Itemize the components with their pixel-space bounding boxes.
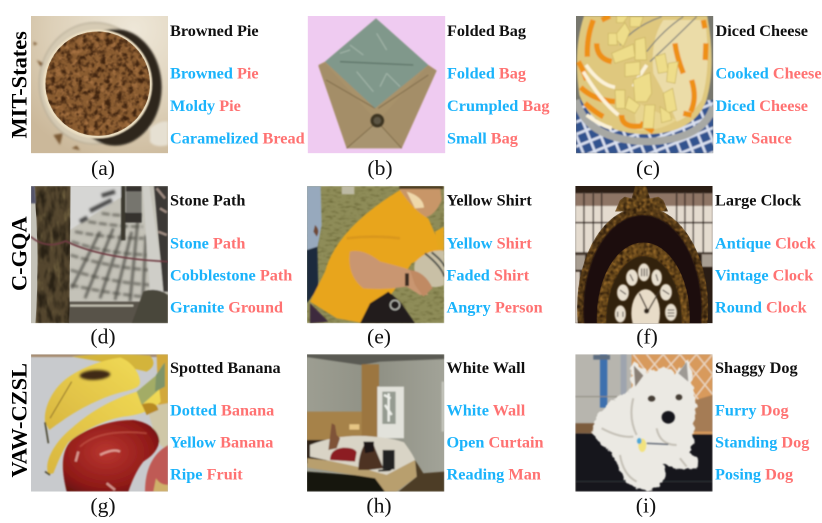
label: Diced Cheese: Diced Cheese	[716, 97, 808, 115]
title: Shaggy Dog: Shaggy Dog	[715, 359, 798, 377]
label: Open Curtain: Open Curtain	[446, 434, 544, 452]
panel (c): diced cheese	[576, 16, 822, 180]
label: Standing Dog: Standing Dog	[715, 434, 809, 452]
photo: browned pie	[31, 16, 168, 154]
caption (g): (g)	[90, 494, 116, 518]
caption (h): (h)	[366, 494, 392, 518]
label: Dotted Banana: Dotted Banana	[170, 401, 274, 419]
panel (a): browned pie	[31, 16, 305, 180]
caption (c): (c)	[636, 156, 660, 180]
photo: yellow shirt	[307, 186, 444, 324]
caption (a): (a)	[91, 156, 115, 180]
label: Antique Clock: Antique Clock	[715, 234, 817, 252]
photo: diced cheese	[576, 16, 714, 154]
label: Yellow Banana: Yellow Banana	[170, 434, 273, 452]
label: Yellow Shirt: Yellow Shirt	[446, 234, 532, 252]
panel (b): folded bag	[308, 16, 550, 180]
title: Browned Pie: Browned Pie	[170, 22, 259, 40]
label: Ripe Fruit: Ripe Fruit	[170, 466, 243, 484]
label: Vintage Clock: Vintage Clock	[715, 266, 814, 284]
photo: folded bag	[308, 16, 446, 154]
label: Moldy Pie: Moldy Pie	[170, 97, 241, 115]
panel (d): stone path	[31, 186, 292, 348]
label: Angry Person: Angry Person	[446, 299, 543, 317]
caption (e): (e)	[367, 324, 391, 348]
photo: large clock	[575, 186, 713, 324]
panel (i): shaggy dog	[575, 354, 810, 518]
label: Furry Dog: Furry Dog	[715, 401, 789, 419]
label: Raw Sauce: Raw Sauce	[716, 129, 792, 147]
label: Cooked Cheese: Cooked Cheese	[716, 65, 822, 83]
label: Stone Path: Stone Path	[170, 234, 245, 252]
label: Granite Ground: Granite Ground	[170, 299, 283, 317]
label: Browned Pie: Browned Pie	[170, 65, 259, 83]
title: Diced Cheese: Diced Cheese	[716, 22, 808, 40]
photo: stone path	[31, 186, 168, 324]
label: Cobblestone Path: Cobblestone Path	[170, 266, 292, 284]
caption (i): (i)	[636, 494, 656, 518]
label: Crumpled Bag: Crumpled Bag	[447, 97, 549, 115]
caption (d): (d)	[90, 324, 116, 348]
title: Large Clock: Large Clock	[715, 192, 802, 210]
label: Caramelized Bread: Caramelized Bread	[170, 129, 305, 147]
panel (f): large clock	[575, 186, 817, 348]
caption (f): (f)	[636, 324, 658, 348]
label: Posing Dog: Posing Dog	[715, 466, 793, 484]
photo: spotted banana	[31, 354, 168, 492]
label: White Wall: White Wall	[446, 401, 526, 419]
title: Stone Path: Stone Path	[170, 192, 245, 210]
caption (b): (b)	[367, 156, 393, 180]
label: Round Clock: Round Clock	[715, 299, 808, 317]
panel (e): yellow shirt	[307, 186, 543, 348]
title: Spotted Banana: Spotted Banana	[170, 359, 281, 377]
label: Reading Man: Reading Man	[446, 466, 541, 484]
photo: shaggy dog	[575, 354, 713, 492]
title: Yellow Shirt: Yellow Shirt	[446, 192, 532, 210]
label: Small Bag: Small Bag	[447, 129, 518, 147]
label: Faded Shirt: Faded Shirt	[446, 266, 530, 284]
photo: white wall	[307, 354, 444, 492]
title: White Wall: White Wall	[446, 359, 526, 377]
panel (g): spotted banana	[31, 354, 281, 518]
title: Folded Bag: Folded Bag	[447, 22, 526, 40]
panel (h): white wall	[307, 354, 544, 518]
label: Folded Bag: Folded Bag	[447, 65, 526, 83]
